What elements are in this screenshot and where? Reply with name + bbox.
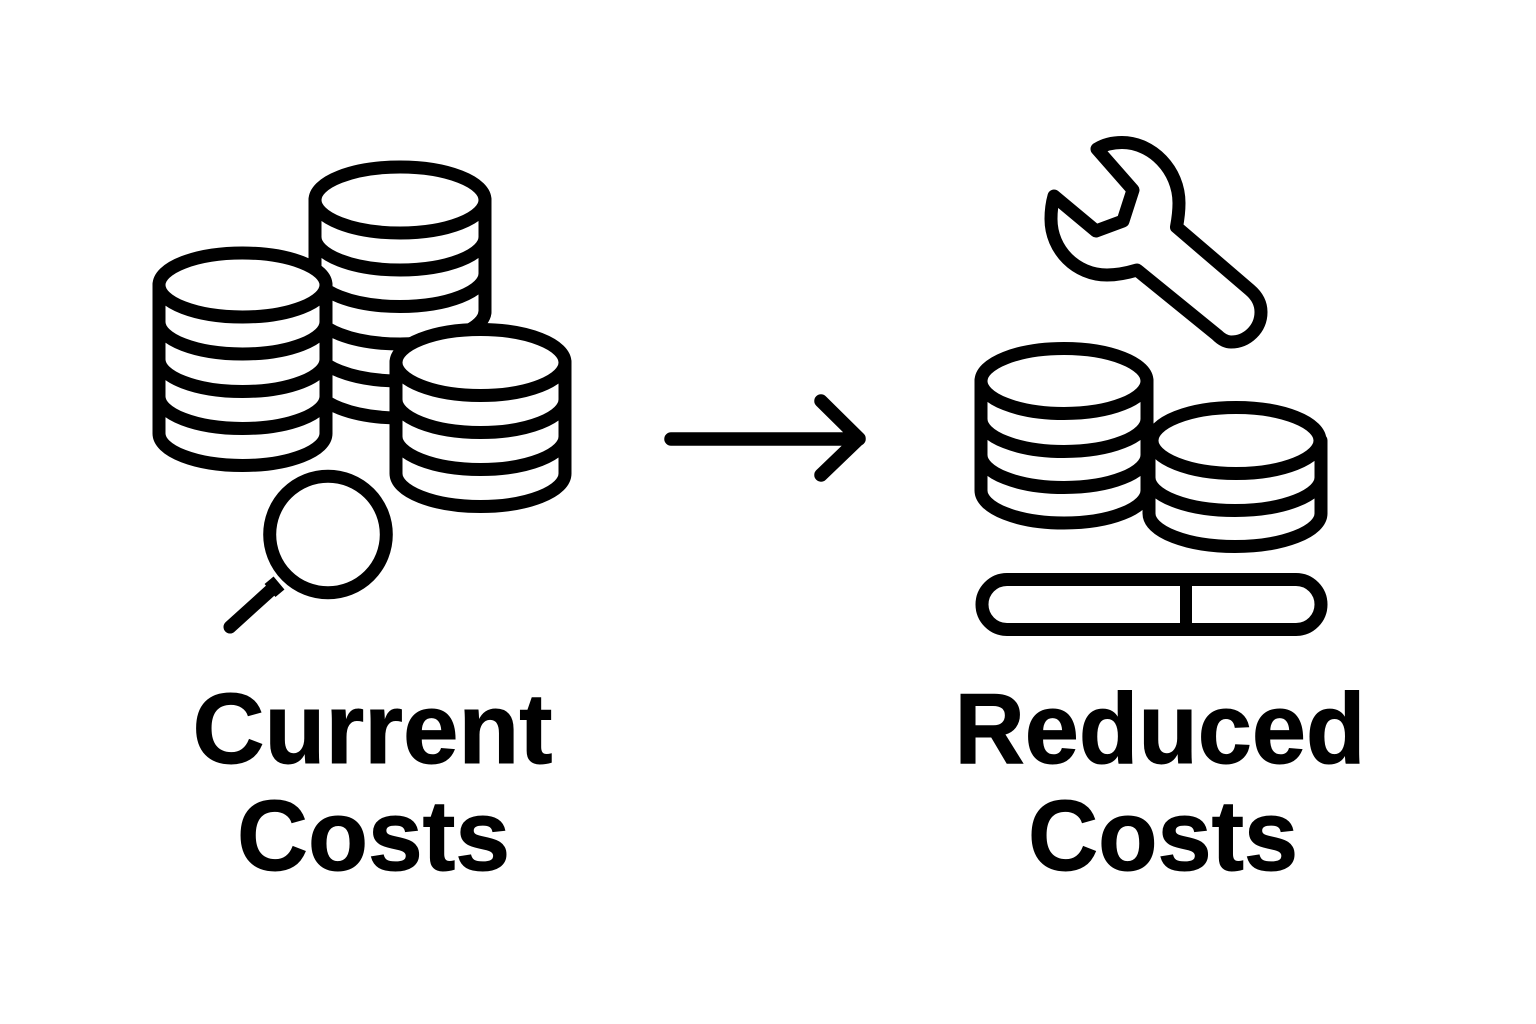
- panel: current costs: [159, 167, 565, 892]
- icon: right side small coin stack: [1149, 408, 1321, 547]
- arrow: [671, 401, 859, 475]
- heading: current costs: Current: [192, 673, 552, 785]
- panel: reduced costs: [954, 142, 1366, 892]
- heading: current costs: [192, 673, 552, 892]
- icon: left side coin stack: [981, 348, 1147, 523]
- heading: reduced costs: Costs: [1028, 780, 1298, 892]
- icon: savings bar: [982, 580, 1321, 630]
- icon: right coin stack: [396, 330, 565, 506]
- icon: wrench: [1051, 142, 1261, 342]
- heading: current costs: Costs: [237, 780, 510, 892]
- heading: reduced costs: [954, 673, 1366, 892]
- icon: left coin stack: [159, 253, 326, 466]
- icon: magnifying glass: [230, 476, 386, 627]
- icon: back coin stack: [315, 167, 485, 418]
- heading: reduced costs: Reduced: [954, 673, 1366, 785]
